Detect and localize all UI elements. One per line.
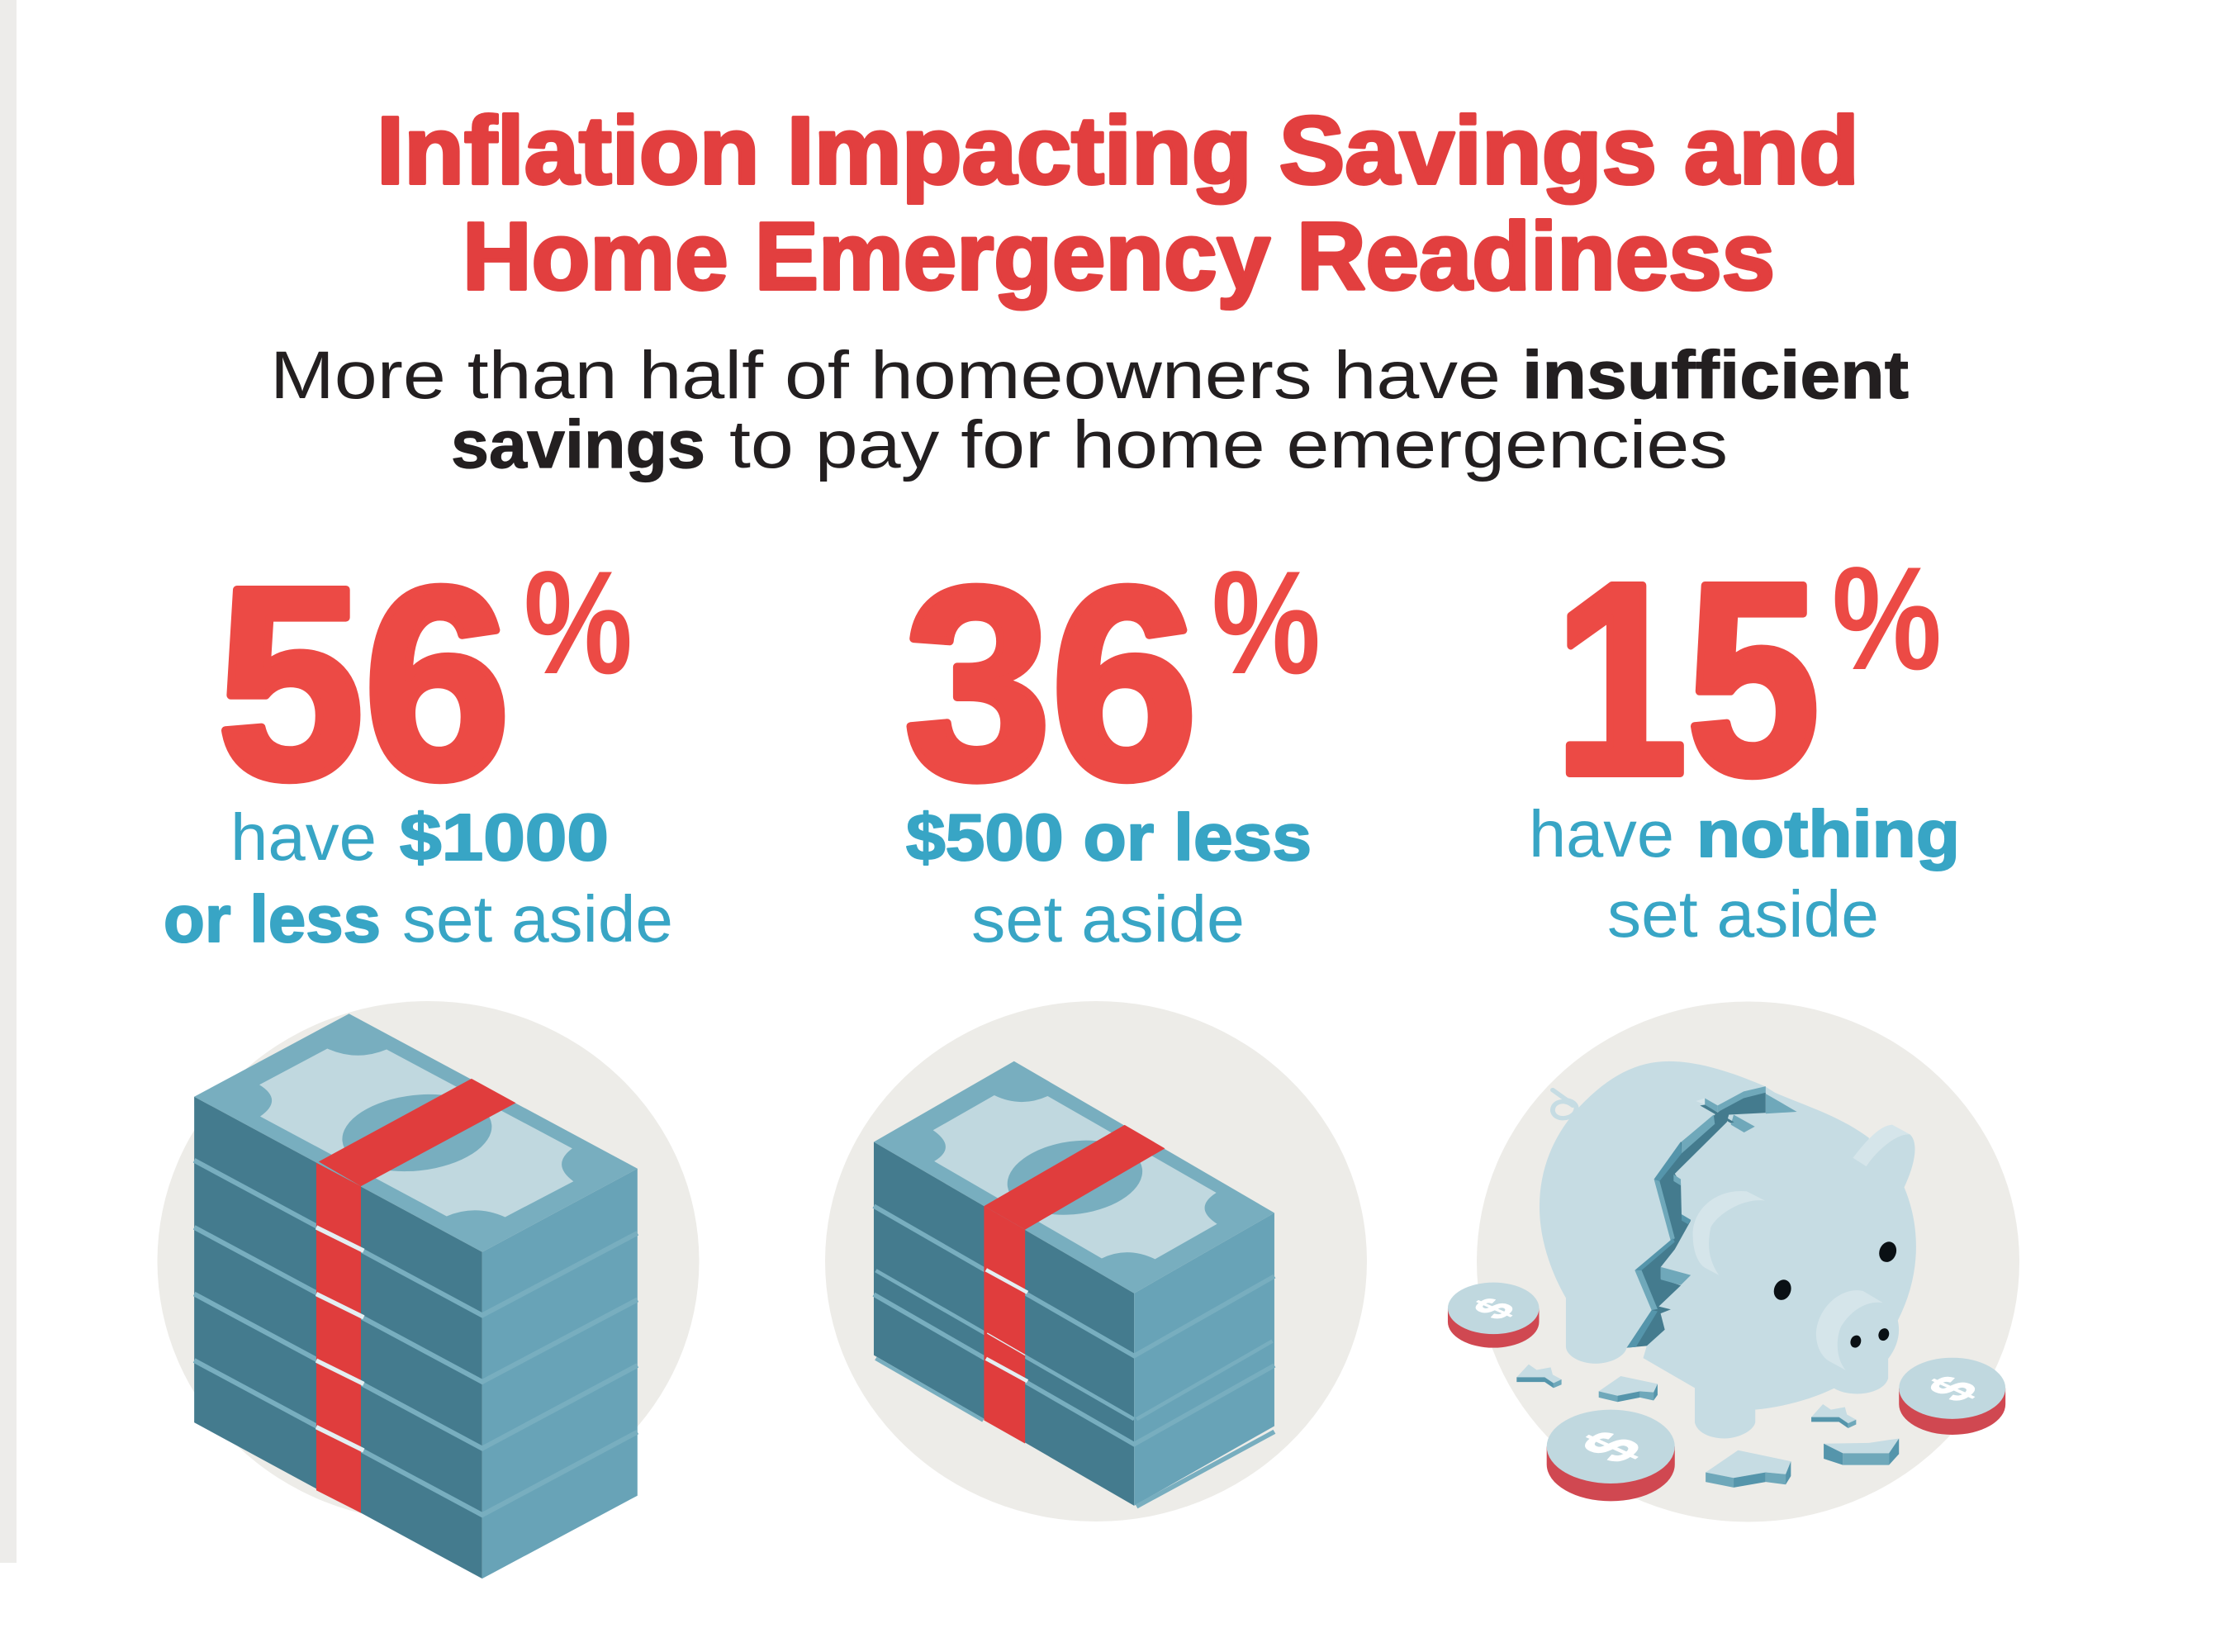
subtitle: savings <box>451 407 705 482</box>
icon: tall money stack <box>157 1001 699 1578</box>
subtitle: More than half of homeowners have <box>270 338 1501 413</box>
coin: large bottom: $ <box>1564 1422 1658 1471</box>
caption: $500 or less: set aside <box>971 882 1245 956</box>
coin: right <box>1899 1358 2005 1435</box>
title: Home Emergency Readiness <box>463 202 1775 310</box>
panel: 15 percent <box>1448 526 2019 1521</box>
caption: nothing set aside: nothing <box>1696 797 1960 871</box>
caption: $500 or less <box>906 800 1312 956</box>
title: Inflation Impacting Savings and <box>377 97 1859 204</box>
statistic: 56%: % <box>524 540 633 705</box>
caption: $1000 or less: $1000 <box>400 800 609 874</box>
caption: nothing set aside: set aside <box>1607 877 1879 951</box>
subtitle: insufficient <box>1522 338 1909 413</box>
caption: $500 or less: $500 or less <box>906 800 1312 874</box>
subtitle <box>270 338 1909 482</box>
coin: right: $ <box>1915 1369 1991 1409</box>
icon: short money stack <box>825 1001 1367 1521</box>
statistic: 15%: 15 <box>1554 526 1820 831</box>
caption: $1000 or less <box>164 800 673 956</box>
statistic: 56%: 56 <box>217 530 510 835</box>
ceramic shards <box>1516 1365 1899 1488</box>
coin: left <box>1448 1283 1539 1348</box>
caption: nothing set aside: have <box>1529 797 1674 871</box>
caption: $1000 or less: have <box>230 800 377 874</box>
panel: 36 percent <box>825 530 1367 1521</box>
coin: left: $ <box>1462 1292 1525 1325</box>
panel: 56 percent <box>157 530 699 1578</box>
caption: nothing set aside <box>1529 797 1960 951</box>
caption: $1000 or less: or less <box>164 882 381 956</box>
statistic: 36%: 36 <box>904 530 1198 835</box>
title <box>377 97 1859 310</box>
statistic: 15%: % <box>1832 536 1942 700</box>
caption: $1000 or less: set aside <box>402 882 673 956</box>
subtitle: to pay for home emergencies <box>729 407 1728 482</box>
coin: large bottom <box>1547 1410 1675 1501</box>
statistic: 36%: % <box>1212 540 1321 705</box>
icon: broken piggy bank with coins <box>1448 1001 2019 1521</box>
